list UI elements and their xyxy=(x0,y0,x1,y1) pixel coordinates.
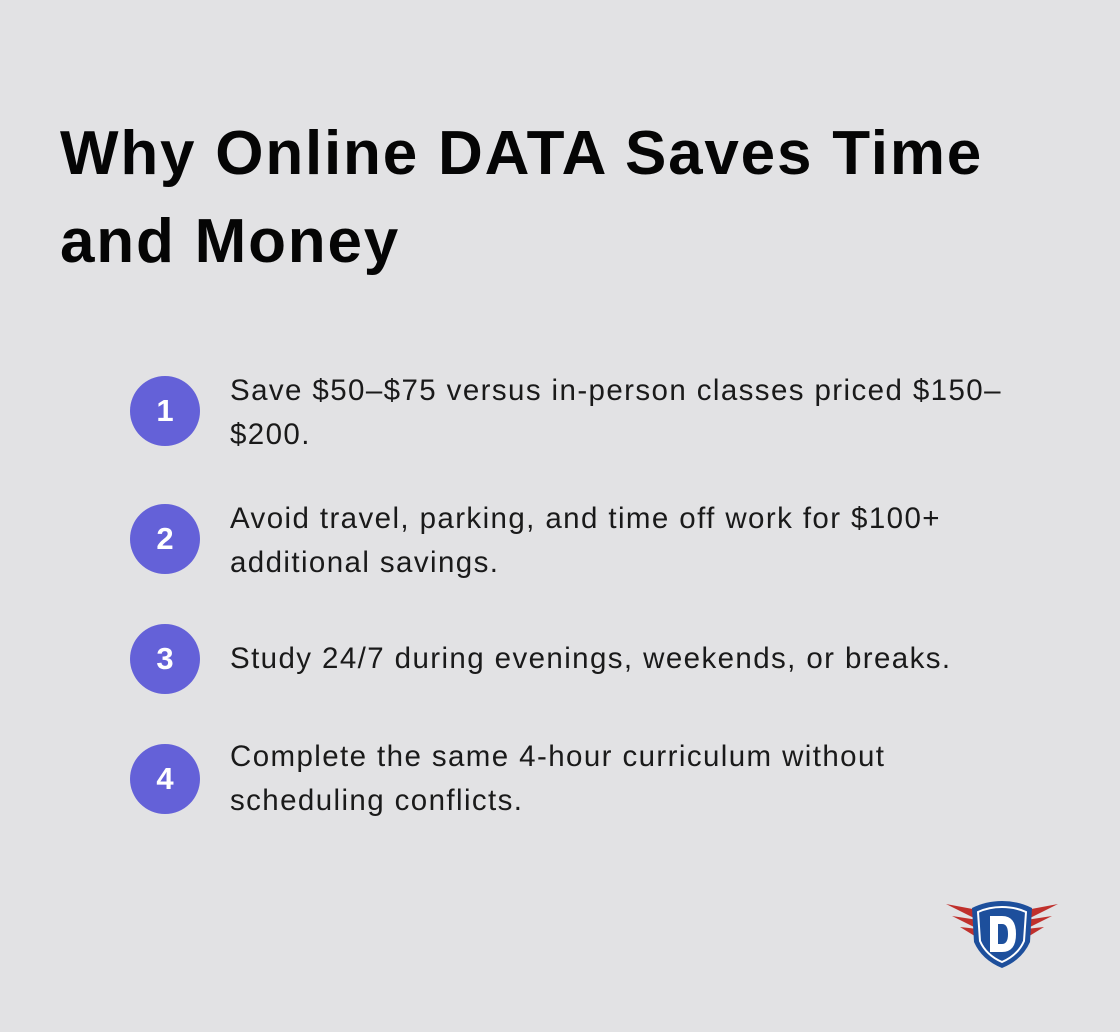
item 4 xyxy=(130,740,885,817)
number 2 xyxy=(130,504,200,574)
text 1: Save $50–$75 versus in-person classes priced $150– xyxy=(230,374,1002,407)
text 4: scheduling conflicts. xyxy=(230,784,523,817)
title: Why Online DATA Saves Time xyxy=(60,119,983,188)
text 2: additional savings. xyxy=(230,546,499,579)
number 3 xyxy=(130,624,200,694)
text 2 xyxy=(230,502,941,579)
number 4: 4 xyxy=(156,761,174,796)
text 2: Avoid travel, parking, and time off work for $100+ xyxy=(230,502,941,535)
title: and Money xyxy=(60,207,400,276)
text 1 xyxy=(230,374,1002,451)
number 4 xyxy=(130,744,200,814)
number 3: 3 xyxy=(156,641,174,676)
text 4 xyxy=(230,740,885,817)
number 2: 2 xyxy=(156,521,174,556)
title xyxy=(60,119,983,276)
item 2 xyxy=(130,502,941,579)
number 1: 1 xyxy=(156,393,174,428)
number 1 xyxy=(130,376,200,446)
icon: shield logo xyxy=(946,901,1058,968)
item 3 xyxy=(130,624,952,694)
text 1: $200. xyxy=(230,418,311,451)
text 3: Study 24/7 during evenings, weekends, or breaks. xyxy=(230,642,952,675)
text 4: Complete the same 4-hour curriculum without xyxy=(230,740,885,773)
item 1 xyxy=(130,374,1002,451)
